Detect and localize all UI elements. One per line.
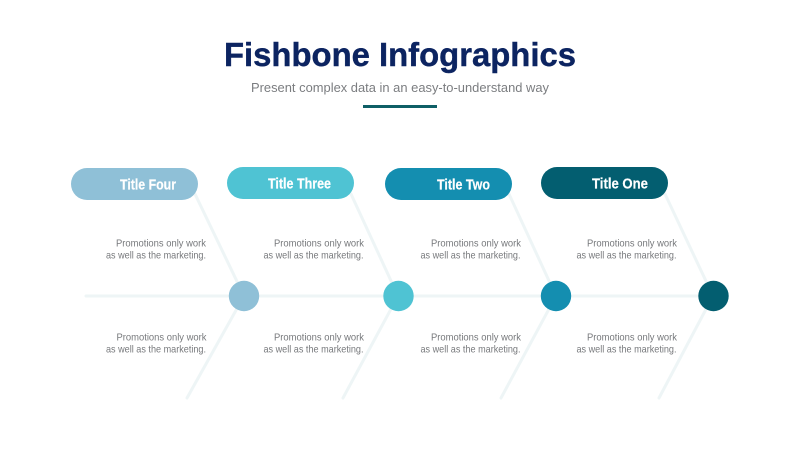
text: three bottom: as well as the marketing. xyxy=(264,344,364,356)
panel: title three xyxy=(227,167,354,199)
subtitle: Present complex data in an easy-to-understand way xyxy=(251,80,549,95)
label: title three: Title Three xyxy=(268,176,331,192)
node: two xyxy=(541,281,571,311)
text: one bottom: as well as the marketing. xyxy=(576,344,676,356)
text: three top: Promotions only work xyxy=(274,238,365,250)
node: four xyxy=(229,281,259,311)
text: two top: as well as the marketing. xyxy=(420,250,520,262)
label: title one: Title One xyxy=(592,176,648,192)
label: title four: Title Four xyxy=(120,178,176,194)
text: one top: as well as the marketing. xyxy=(576,250,676,262)
text: two top: Promotions only work xyxy=(431,238,522,250)
panel: title two xyxy=(385,168,512,200)
text: four top: Promotions only work xyxy=(116,238,207,250)
title underline xyxy=(363,105,437,108)
fishbone spine xyxy=(86,294,713,298)
fishbone ribs xyxy=(187,194,713,398)
panel: title four xyxy=(71,168,198,200)
text: one bottom: Promotions only work xyxy=(587,332,678,344)
pill: title one xyxy=(541,167,668,199)
title: Fishbone Infographics xyxy=(224,36,576,73)
text: one top: Promotions only work xyxy=(587,238,678,250)
text: two bottom: Promotions only work xyxy=(431,332,522,344)
pill: title two xyxy=(385,168,512,200)
pill: title four xyxy=(71,168,198,200)
text: three top: as well as the marketing. xyxy=(264,250,364,262)
text: four top: as well as the marketing. xyxy=(106,250,206,262)
text: four bottom: as well as the marketing. xyxy=(106,344,206,356)
panel: title one xyxy=(541,167,668,199)
node: three xyxy=(383,281,414,311)
text: three bottom: Promotions only work xyxy=(274,332,365,344)
node: one xyxy=(698,281,729,311)
text: two bottom: as well as the marketing. xyxy=(420,344,520,356)
text: four bottom: Promotions only work xyxy=(116,332,207,344)
pill: title three xyxy=(227,167,354,199)
label: title two: Title Two xyxy=(437,178,490,194)
